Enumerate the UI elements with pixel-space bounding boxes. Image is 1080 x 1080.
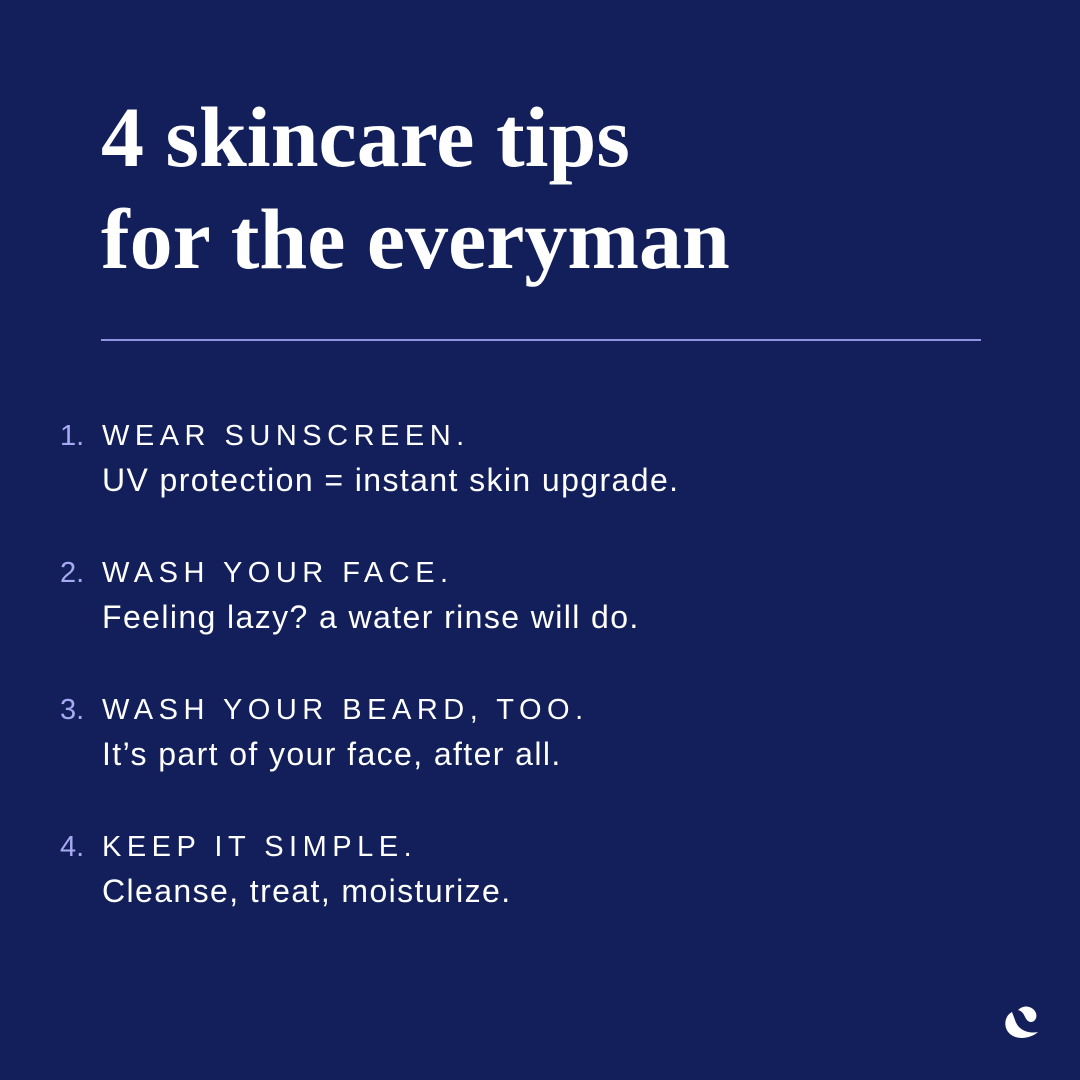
tip 4: Cleanse, treat, moisturize. [102, 873, 512, 909]
tip 4: 4. [60, 831, 84, 863]
tip 4: KEEP IT SIMPLE. [102, 831, 417, 863]
tip 3: WASH YOUR BEARD, TOO. [102, 694, 589, 726]
tip 2: Feeling lazy? a water rinse will do. [102, 599, 640, 635]
tip 1 [60, 420, 679, 498]
icon: logo [1005, 1006, 1038, 1038]
tip 3: It’s part of your face, after all. [102, 736, 562, 772]
tip 4 [60, 831, 512, 909]
tip 1: UV protection = instant skin upgrade. [102, 462, 679, 498]
tip 3: 3. [60, 694, 84, 726]
title: for the everyman [101, 191, 730, 287]
tip 1: 1. [60, 420, 84, 452]
tip 3 [60, 694, 589, 772]
title [101, 89, 730, 287]
tip 2 [60, 557, 640, 635]
tip 2: WASH YOUR FACE. [102, 557, 454, 589]
tip 2: 2. [60, 557, 84, 589]
title: 4 skincare tips [101, 89, 630, 185]
tip 1: WEAR SUNSCREEN. [102, 420, 470, 452]
